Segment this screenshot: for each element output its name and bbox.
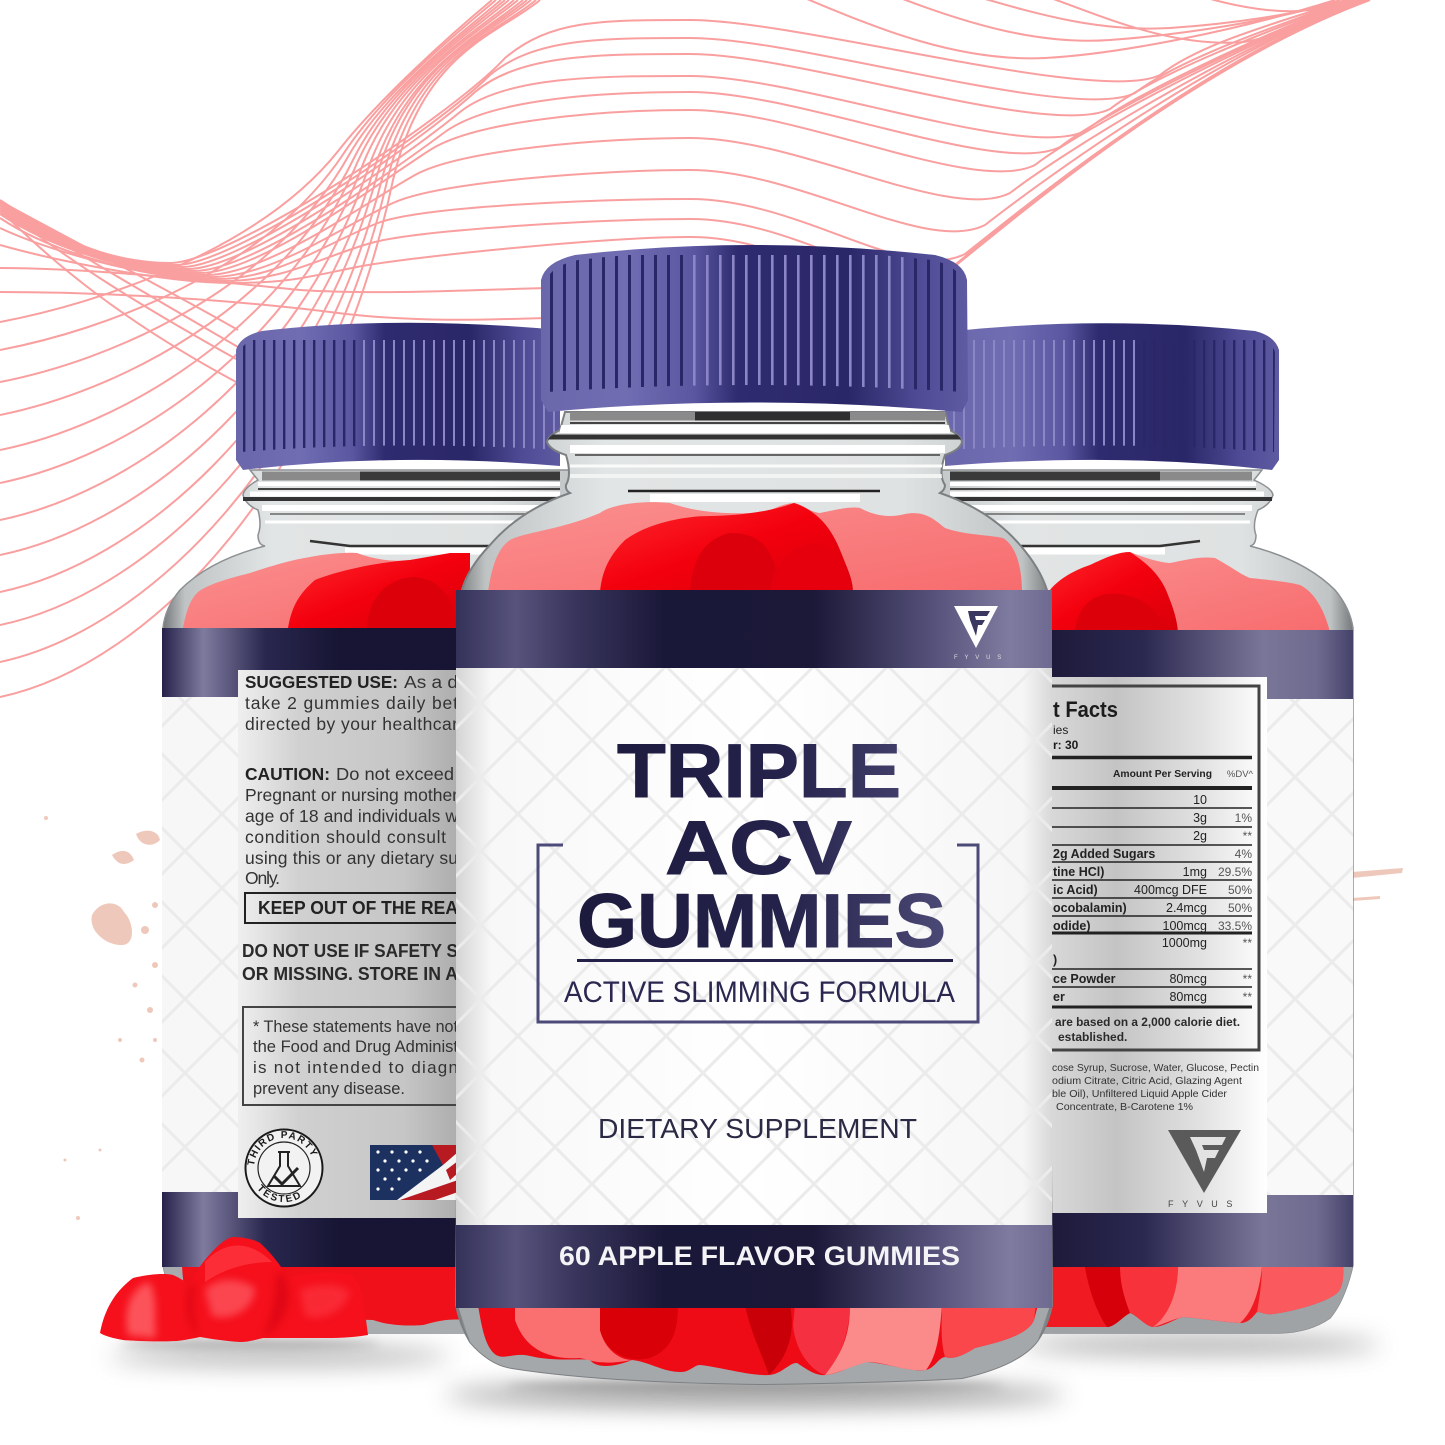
suggested use: take 2 gummies daily bet — [245, 693, 458, 713]
keep out box: KEEP OUT OF THE REA — [258, 898, 458, 918]
background wave lines — [0, 0, 1370, 697]
suggested use: SUGGESTED USE: — [245, 672, 398, 692]
subtitle: ACTIVE SLIMMING FORMULA — [564, 976, 955, 1009]
nutrition amounts: 1mg — [1183, 865, 1207, 879]
paint splatter — [44, 816, 1403, 1220]
nutrition amounts: 2g — [1193, 829, 1207, 843]
nutrition footnote — [1055, 1015, 1240, 1044]
nutrition amounts: 2.4mcg — [1166, 901, 1207, 915]
bottle base — [163, 1265, 470, 1333]
label white section — [456, 668, 1052, 1225]
FDA disclaimer: * These statements have not — [253, 1017, 458, 1036]
label bottom bar — [1050, 1195, 1353, 1267]
gummies top — [488, 502, 1022, 592]
FDA disclaimer: is not intended to diagn — [253, 1058, 458, 1077]
title: TRIPLE — [617, 729, 901, 814]
cap — [945, 323, 1279, 470]
caution — [245, 764, 458, 888]
neck glass bands — [243, 476, 560, 551]
nutrition amounts: 80mcg — [1169, 972, 1207, 986]
nutrition amounts: 3g — [1193, 811, 1207, 825]
nutrition row names: ic Acid) — [1053, 883, 1098, 897]
nutrition daily values: ** — [1243, 936, 1252, 950]
label top bar — [1050, 630, 1353, 699]
safety warning: DO NOT USE IF SAFETY S — [242, 941, 458, 961]
gummies bottom — [1040, 1265, 1343, 1327]
nutrition column heads: Amount Per Serving — [1113, 768, 1212, 780]
nutrition facts heading — [1053, 697, 1118, 752]
bottle base — [1040, 1265, 1353, 1333]
caution: CAUTION: — [245, 764, 330, 784]
title: GUMMIES — [577, 879, 946, 964]
left back bottle — [162, 322, 568, 1334]
title: ACV — [665, 806, 852, 891]
neck glass bands — [547, 415, 962, 498]
label white section — [162, 697, 460, 1192]
neck glass bands — [950, 476, 1272, 551]
FDA disclaimer: prevent any disease. — [253, 1079, 405, 1098]
third party tested badge — [244, 1128, 324, 1208]
nutrition daily values: ** — [1243, 829, 1252, 843]
nutrition footnote: established. — [1058, 1030, 1127, 1044]
FYVUS logo white — [954, 606, 1008, 661]
glass body — [905, 470, 1353, 1333]
nutrition row names: 2g Added Sugars — [1053, 847, 1155, 861]
label bottom bar — [456, 1225, 1052, 1308]
label top bar — [456, 590, 1052, 668]
nutrition daily values: 50% — [1228, 883, 1252, 897]
nutrition amounts — [1134, 793, 1207, 1004]
gummies top — [183, 553, 470, 630]
nutrition facts heading: ies — [1053, 723, 1068, 737]
right back bottle — [905, 323, 1353, 1333]
ingredients: ble Oil), Unfiltered Liquid Apple Cider — [1052, 1088, 1227, 1100]
nutrition facts heading: r: 30 — [1053, 738, 1079, 752]
nutrition amounts: 100mcg — [1163, 919, 1207, 933]
nutrition row names: ce Powder — [1053, 972, 1116, 986]
text panel — [238, 670, 460, 1218]
FYVUS logo grey — [1168, 1130, 1241, 1209]
cap — [541, 245, 968, 412]
nutrition daily values: 4% — [1235, 847, 1252, 861]
USA flag — [370, 1145, 458, 1200]
nutrition daily values: 29.5% — [1218, 865, 1252, 879]
caution: using this or any dietary su — [245, 848, 458, 868]
gummies top — [1040, 552, 1330, 632]
nutrition row names: ocobalamin) — [1053, 901, 1127, 915]
nutrition row names: ) — [1053, 953, 1057, 967]
nutrition daily values: 50% — [1228, 901, 1252, 915]
nutrition daily values: ** — [1243, 990, 1252, 1004]
dietary supplement: DIETARY SUPPLEMENT — [598, 1113, 917, 1144]
nutrition daily values — [1218, 811, 1252, 1004]
nutrition daily values: ** — [1243, 972, 1252, 986]
FYVUS logo grey: FYVUS — [1168, 1199, 1241, 1209]
ingredients — [1052, 1062, 1259, 1113]
glass body — [163, 470, 600, 1333]
nutrition facts heading: t Facts — [1053, 697, 1118, 722]
safety warning: OR MISSING. STORE IN A — [242, 964, 458, 984]
caution: Pregnant or nursing mother — [245, 785, 458, 805]
safety warning — [242, 941, 458, 984]
label bottom bar — [162, 1192, 460, 1267]
caution: Do not exceed — [336, 764, 454, 784]
caution: age of 18 and individuals w — [245, 806, 458, 826]
gummies bottom — [182, 1265, 470, 1325]
nutrition row names: tine HCl) — [1053, 865, 1104, 879]
caution: condition should consult — [245, 827, 446, 847]
ground shadows — [110, 1335, 1380, 1407]
loose gummies — [100, 1237, 368, 1342]
nutrition amounts: 80mcg — [1169, 990, 1207, 1004]
suggested use: directed by your healthcar — [245, 714, 458, 734]
center bottle — [456, 245, 1052, 1384]
nutrition daily values: 33.5% — [1218, 919, 1252, 933]
nutrition facts frame — [1050, 686, 1259, 1050]
nutrition row names — [1053, 847, 1155, 1004]
third party tested badge: THIRD PARTY — [247, 1131, 318, 1165]
keep out box — [245, 893, 460, 923]
FYVUS logo white: FYVUS — [954, 655, 1008, 661]
glass body — [456, 412, 1052, 1384]
label white section — [1050, 699, 1353, 1195]
third party tested badge: TESTED — [258, 1184, 300, 1202]
suggested use — [245, 672, 458, 734]
nutrition row names: odide) — [1053, 919, 1090, 933]
ingredients: odium Citrate, Citric Acid, Glazing Agent — [1052, 1075, 1242, 1087]
ingredients: cose Syrup, Sucrose, Water, Glucose, Pectin — [1052, 1062, 1259, 1074]
nutrition daily values: 1% — [1235, 811, 1252, 825]
gummy count: 60 APPLE FLAVOR GUMMIES — [559, 1241, 960, 1271]
label top bar — [162, 628, 460, 697]
nutrition table rules — [1052, 758, 1252, 1007]
nutrition amounts: 1000mg — [1162, 936, 1207, 950]
title frame — [538, 845, 978, 1022]
caution: Only. — [245, 868, 280, 888]
text panel — [1050, 677, 1267, 1213]
nutrition column heads: %DV^ — [1227, 769, 1254, 780]
title underline — [577, 959, 953, 962]
suggested use: As a d — [404, 672, 458, 692]
ingredients: Concentrate, B-Carotene 1% — [1056, 1101, 1193, 1113]
bottle base — [456, 1300, 1052, 1384]
nutrition amounts: 400mcg DFE — [1134, 883, 1207, 897]
nutrition row names: er — [1053, 990, 1065, 1004]
cap — [236, 323, 560, 470]
FDA disclaimer — [243, 1007, 460, 1105]
nutrition amounts: 10 — [1193, 793, 1207, 807]
nutrition footnote: are based on a 2,000 calorie diet. — [1055, 1015, 1240, 1029]
title — [577, 729, 946, 964]
FDA disclaimer: the Food and Drug Administ — [253, 1037, 458, 1056]
gummies bottom — [478, 1305, 1038, 1375]
